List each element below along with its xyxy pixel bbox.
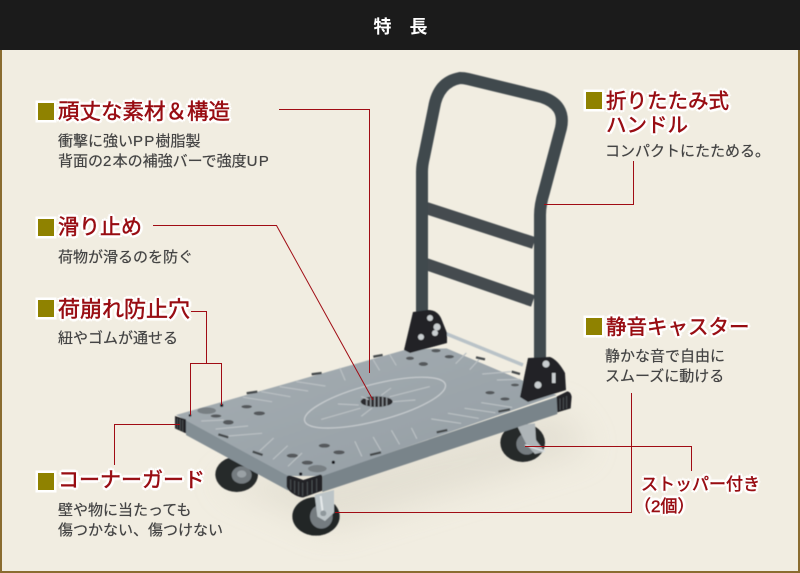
- callout: stopper: [634, 472, 760, 517]
- text: corner guard: [58, 502, 223, 539]
- text: load holes: 紐やゴムが通せる: [58, 330, 178, 347]
- heading: load holes: [38, 300, 54, 317]
- heading: folding handle: [586, 92, 602, 109]
- load-securing holes: [189, 404, 335, 476]
- platform side faces: [186, 420, 288, 491]
- text: 荷崩れ防止穴: [58, 297, 190, 322]
- left rear wheel: [215, 457, 258, 492]
- text: 静音キャスター: [606, 316, 750, 339]
- front wheel: [292, 490, 340, 536]
- text: casters: 静かな音で自由に: [605, 348, 725, 365]
- text: 折りたたみ式: [606, 90, 729, 113]
- text: corner guard: 傷つかない、傷つけない: [58, 522, 223, 539]
- text: casters: [605, 348, 725, 385]
- text: material: 背面の2本の補強バーで強度UP: [58, 153, 270, 170]
- header bar: [0, 0, 800, 50]
- heading: corner guard: [38, 473, 54, 490]
- corner guards: [175, 391, 572, 497]
- floor shadow: [215, 410, 590, 530]
- text: ハンドル: [606, 114, 688, 137]
- callout: stopper: ストッパー付き: [641, 475, 760, 494]
- text: material: 衝撃に強いPP樹脂製: [58, 133, 200, 150]
- text: コーナーガード: [58, 469, 205, 492]
- text: folding handle: コンパクトにたためる。: [605, 143, 770, 160]
- cart wheels and platform: [175, 348, 572, 536]
- heading: anti-slip: [38, 219, 54, 236]
- central oval mark: [300, 367, 450, 439]
- folding handle: [422, 78, 562, 365]
- right rear wheel with stopper: [500, 423, 545, 462]
- platform deck: [176, 348, 557, 476]
- text: 頑丈な素材＆構造: [58, 100, 230, 124]
- non-slip centre: [361, 396, 393, 407]
- text: corner guard: 壁や物に当たっても: [58, 502, 192, 519]
- text: material: [58, 133, 270, 170]
- cart illustration: [175, 78, 572, 536]
- heading: material: [38, 103, 54, 120]
- text: anti-slip: 荷物が滑るのを防ぐ: [58, 249, 193, 266]
- text: 滑り止め: [58, 216, 142, 239]
- leader lines: [114, 110, 692, 512]
- heading: casters: [586, 318, 602, 335]
- handle brackets: [404, 310, 566, 402]
- axle rod: [437, 330, 523, 365]
- text: casters: スムーズに動ける: [605, 368, 724, 385]
- callout: stopper: （2個）: [634, 497, 694, 516]
- header bar: 特 長: [374, 17, 428, 37]
